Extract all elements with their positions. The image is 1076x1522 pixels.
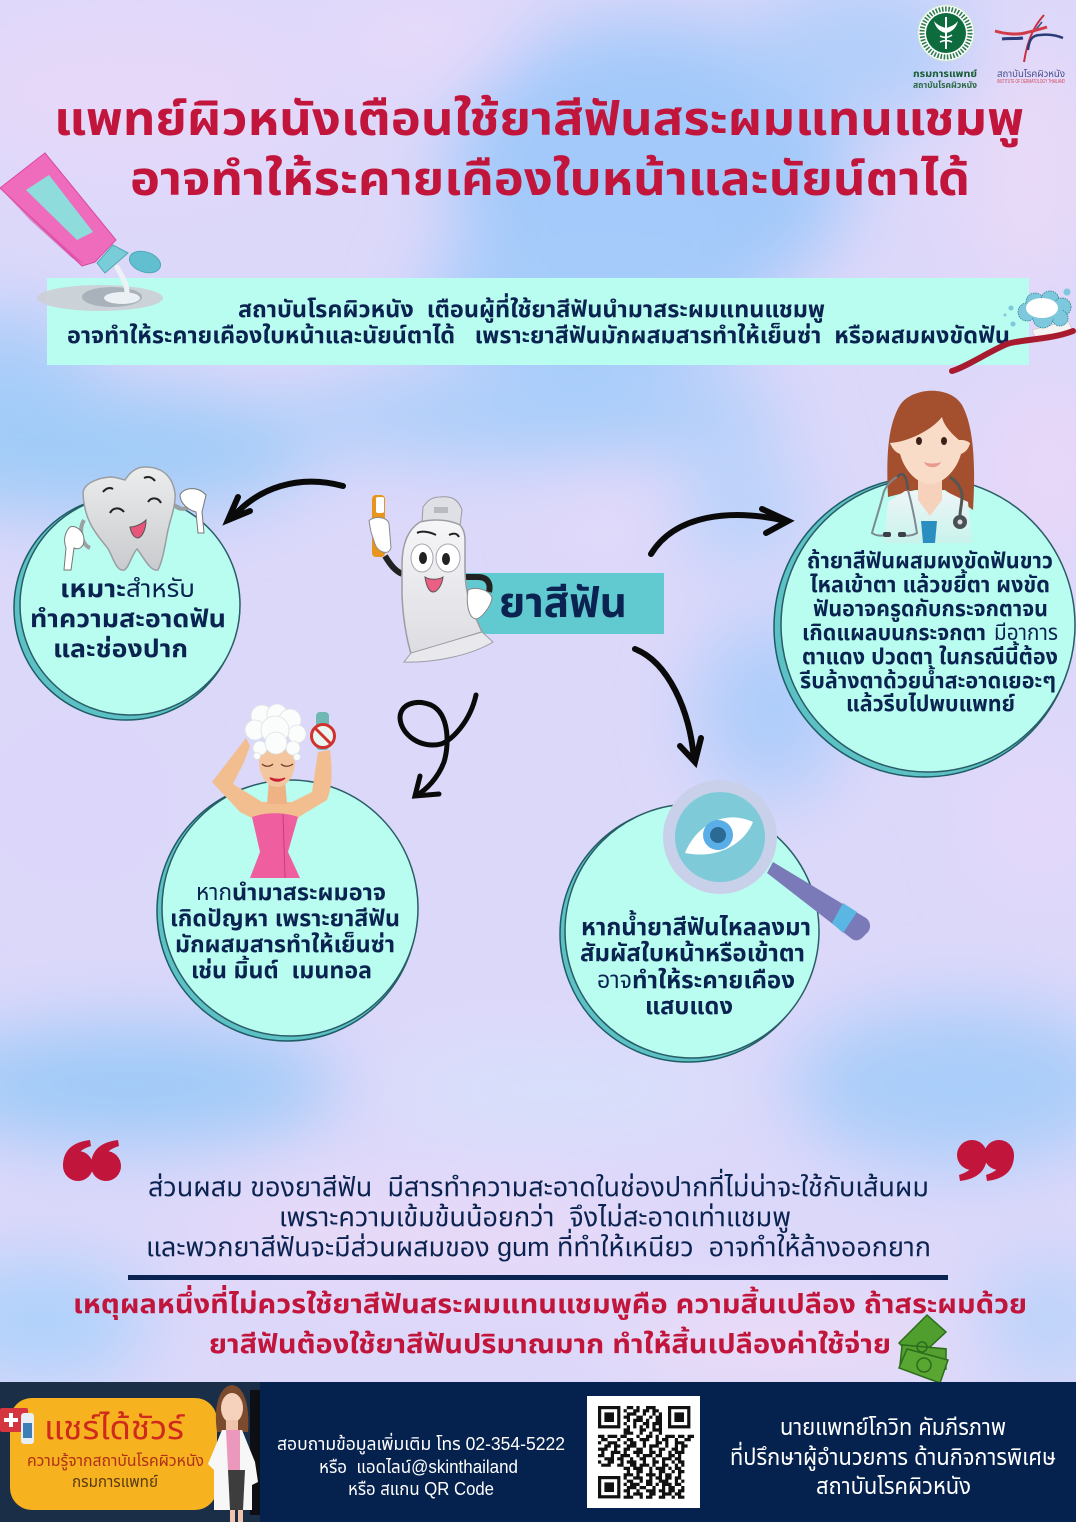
icon: pink toothpaste tube — [0, 153, 163, 311]
summary band: อาจทำให้ระคายเคืองใบหน้าและนัยน์ตาได้ เพราะยาสีฟันมักผสมสารทำให้เย็นซ่า หรือผสมผงขัดฟัน — [67, 322, 1010, 348]
panel: suitable for teeth: และช่องปาก — [53, 635, 188, 663]
panel: doctor warning: ไหลเข้าตา แล้วขยี้ตา ผงขัด — [810, 569, 1050, 597]
panel: shampoo problem: นำมาสระผมอาจ — [232, 879, 386, 905]
icon: footer doctor — [208, 1385, 258, 1522]
icon: doctor — [872, 391, 974, 543]
footer: contact text: หรือ สแกน QR Code — [348, 1479, 494, 1499]
panel: shampoo problem: เกิดปัญหา เพราะยาสีฟัน — [170, 905, 400, 931]
icon: toothpaste mascot — [369, 495, 493, 662]
title: แพทย์ผิวหนังเตือนใช้ยาสีฟันสระผมแทนแชมพู — [54, 92, 1024, 147]
footer: share badge: กรมการแพทย์ — [72, 1474, 158, 1491]
panel: eye and skin irritation: แสบแดง — [645, 993, 733, 1020]
summary band — [47, 278, 1029, 365]
icon: closing quote — [957, 1140, 1014, 1181]
text block: ingredients: และพวกยาสีฟันจะมีส่วนผสมของ gum ที่ทำให้เหนียว อาจทำให้ล้างออกยาก — [146, 1228, 931, 1262]
footer: share badge — [0, 1382, 260, 1522]
summary band: สถาบันโรคผิวหนัง เตือนผู้ที่ใช้ยาสีฟันนำมาสระผมแทนแชมพู — [238, 293, 825, 323]
panel: suitable for teeth: สำหรับ — [126, 575, 195, 603]
logo: Department of Medical Services — [913, 5, 977, 90]
panel: eye and skin irritation: สัมผัสใบหน้าหรือเข้าตา — [580, 939, 805, 967]
panel: eye and skin irritation: อาจ — [597, 967, 632, 994]
QR code — [587, 1396, 700, 1508]
text block: ingredients — [146, 1168, 931, 1262]
text block: reason: ยาสีฟันต้องใช้ยาสีฟันปริมาณมาก ทำให้สิ้นเปลืองค่าใช้จ่าย — [209, 1327, 891, 1359]
icon: toothbrush with foam — [952, 288, 1073, 371]
panel: toothpaste label: ยาสีฟัน — [499, 579, 627, 626]
logo: Institute of Dermatology — [995, 15, 1065, 85]
arrow: to tooth — [228, 482, 343, 520]
title — [54, 92, 1024, 205]
footer: contact text — [277, 1432, 565, 1499]
text block: reason — [73, 1285, 1027, 1359]
panel: toothpaste label — [465, 573, 664, 634]
text block: ingredients: เพราะความเข้มข้นน้อยกว่า จึงไม่สะอาดเท่าแชมพู — [279, 1202, 791, 1233]
logo: Department of Medical Services: สถาบันโรคผิวหนัง — [913, 80, 977, 90]
arrow: to doctor — [651, 509, 788, 554]
panel: doctor warning: ถ้ายาสีฟันผสมผงขัดฟันขาว — [807, 548, 1053, 573]
text block: reason: เหตุผลหนึ่งที่ไม่ควรใช้ยาสีฟันสระผมแทนแชมพูคือ ความสิ้นเปลือง ถ้าสระผมด้วย — [73, 1285, 1027, 1320]
icon: woman washing hair — [212, 704, 334, 878]
panel: suitable for teeth — [14, 467, 240, 720]
footer: quoted doctor: สถาบันโรคผิวหนัง — [816, 1473, 971, 1499]
footer: quoted doctor: นายแพทย์โกวิท คัมภีรภาพ — [780, 1414, 1006, 1440]
footer bar — [0, 1382, 1076, 1522]
footer: quoted doctor: ที่ปรึกษาผู้อำนวยการ ด้านกิจการพิเศษ — [730, 1441, 1056, 1472]
panel: eye and skin irritation: ทำให้ระคายเคือง — [632, 966, 795, 994]
panel: eye and skin irritation — [560, 786, 870, 1062]
footer: share badge: ความรู้จากสถาบันโรคผิวหนัง — [27, 1453, 204, 1470]
panel: eye and skin irritation: หากน้ำยาสีฟันไหลลงมา — [581, 910, 811, 941]
panel: suitable for teeth: เหมาะ — [60, 575, 126, 603]
panel: shampoo problem: หาก — [196, 879, 232, 905]
logo: Department of Medical Services: กรมการแพทย์ — [913, 69, 977, 80]
panel: doctor warning: ฟันอาจครูดกับกระจกตาจน — [813, 596, 1048, 622]
icon: magnifier over eye — [669, 786, 870, 940]
panel: doctor warning: ตาแดง ปวดตา ในกรณีนี้ต้อง — [802, 641, 1058, 669]
panel: doctor warning: รีบล้างตาด้วยน้ำสะอาดเยอะๆ — [800, 665, 1056, 693]
panel: doctor warning: เกิดแผลบนกระจกตา — [802, 620, 986, 645]
footer: contact text: หรือ แอดไลน์@skinthailand — [319, 1457, 518, 1477]
footer: contact text: สอบถามข้อมูลเพิ่มเติม โทร 02-354-5222 — [277, 1432, 565, 1456]
panel: suitable for teeth: ทำความสะอาดฟัน — [30, 605, 226, 633]
logo: Institute of Dermatology: สถาบันโรคผิวหนัง — [997, 68, 1065, 80]
panel: shampoo problem — [157, 704, 418, 1041]
panel: doctor warning: แล้วรีบไปพบแพทย์ — [846, 691, 1015, 716]
panel: shampoo problem: เช่น มิ้นต์ เมนทอล — [191, 955, 372, 983]
panel: shampoo problem: มักผสมสารทำให้เย็นซ่า — [175, 931, 395, 957]
text block: ingredients: ส่วนผสม ของยาสีฟัน มีสารทำความสะอาดในช่องปากที่ไม่น่าจะใช้กับเส้นผม — [148, 1168, 929, 1202]
icon: money stack — [897, 1315, 949, 1383]
icon: opening quote — [63, 1140, 121, 1181]
title: อาจทำให้ระคายเคืองใบหน้าและนัยน์ตาได้ — [130, 152, 970, 205]
arrow: to eye — [635, 649, 701, 762]
panel: doctor warning: มีอาการ — [994, 620, 1058, 645]
panel: doctor warning — [774, 391, 1075, 777]
footer: share badge: แชร์ได้ชัวร์ — [44, 1409, 186, 1446]
footer: quoted doctor — [730, 1414, 1056, 1499]
arrow: looped to shampoo circle — [400, 695, 476, 796]
icon: smiling tooth — [64, 467, 206, 570]
